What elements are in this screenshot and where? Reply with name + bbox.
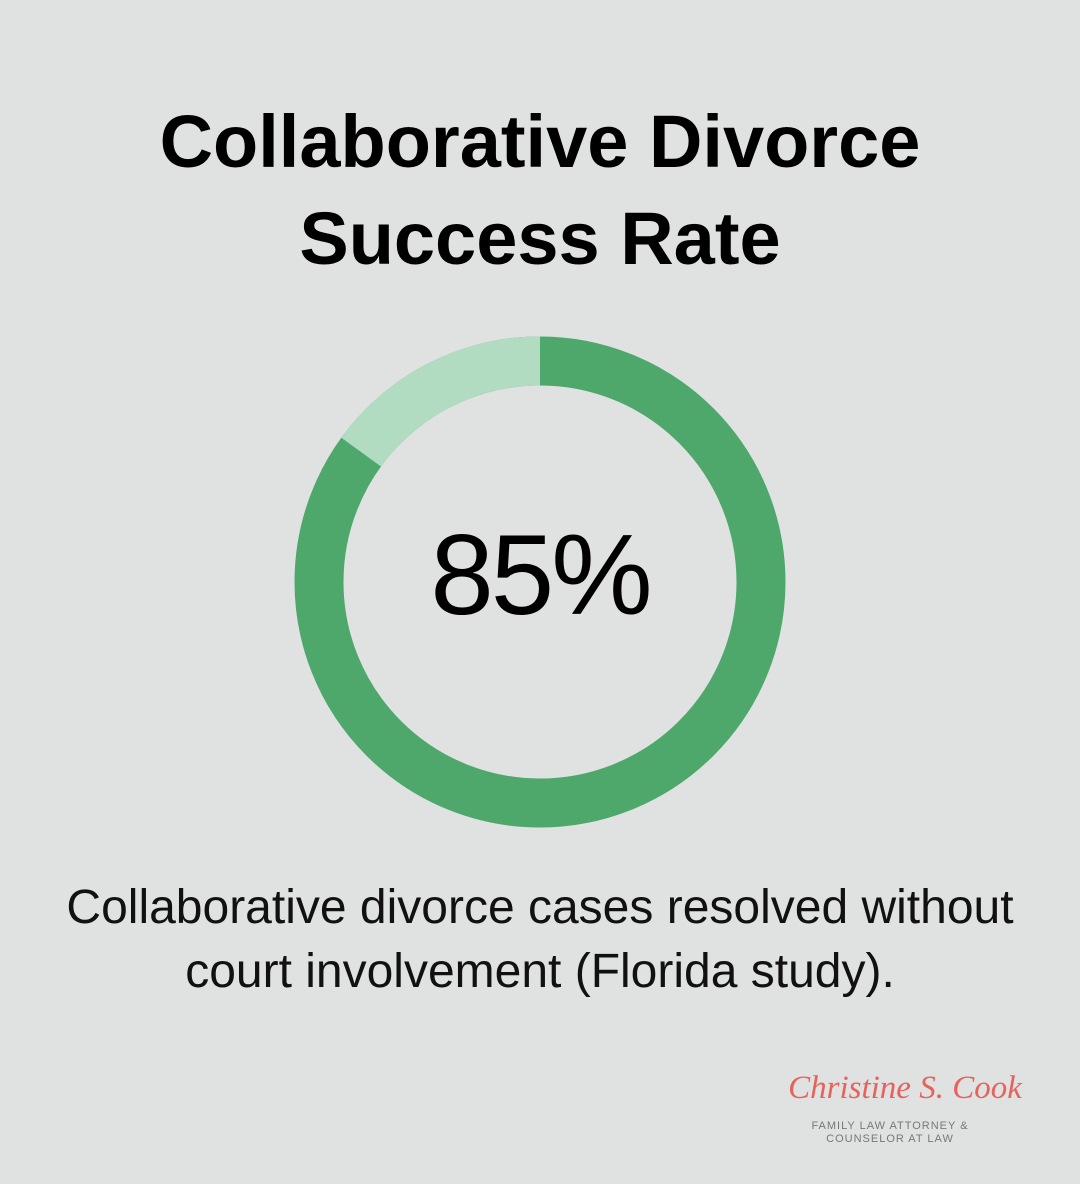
caption [66, 881, 1014, 998]
logo tagline: COUNSELOR AT LAW [826, 1133, 954, 1145]
percentage value: 85% [430, 512, 650, 639]
green ring segment (85%) [319, 361, 761, 803]
logo tagline [811, 1120, 969, 1145]
title: Success Rate [299, 197, 781, 280]
logo tagline: FAMILY LAW ATTORNEY & [811, 1120, 969, 1132]
caption: Collaborative divorce cases resolved without [66, 881, 1014, 934]
caption: court involvement (Florida study). [185, 945, 895, 998]
light ring segment (15%) [361, 361, 540, 452]
logo [788, 1070, 1022, 1145]
title [160, 100, 920, 280]
logo script name: Christine S. Cook [788, 1070, 1022, 1106]
title: Collaborative Divorce [160, 100, 920, 183]
